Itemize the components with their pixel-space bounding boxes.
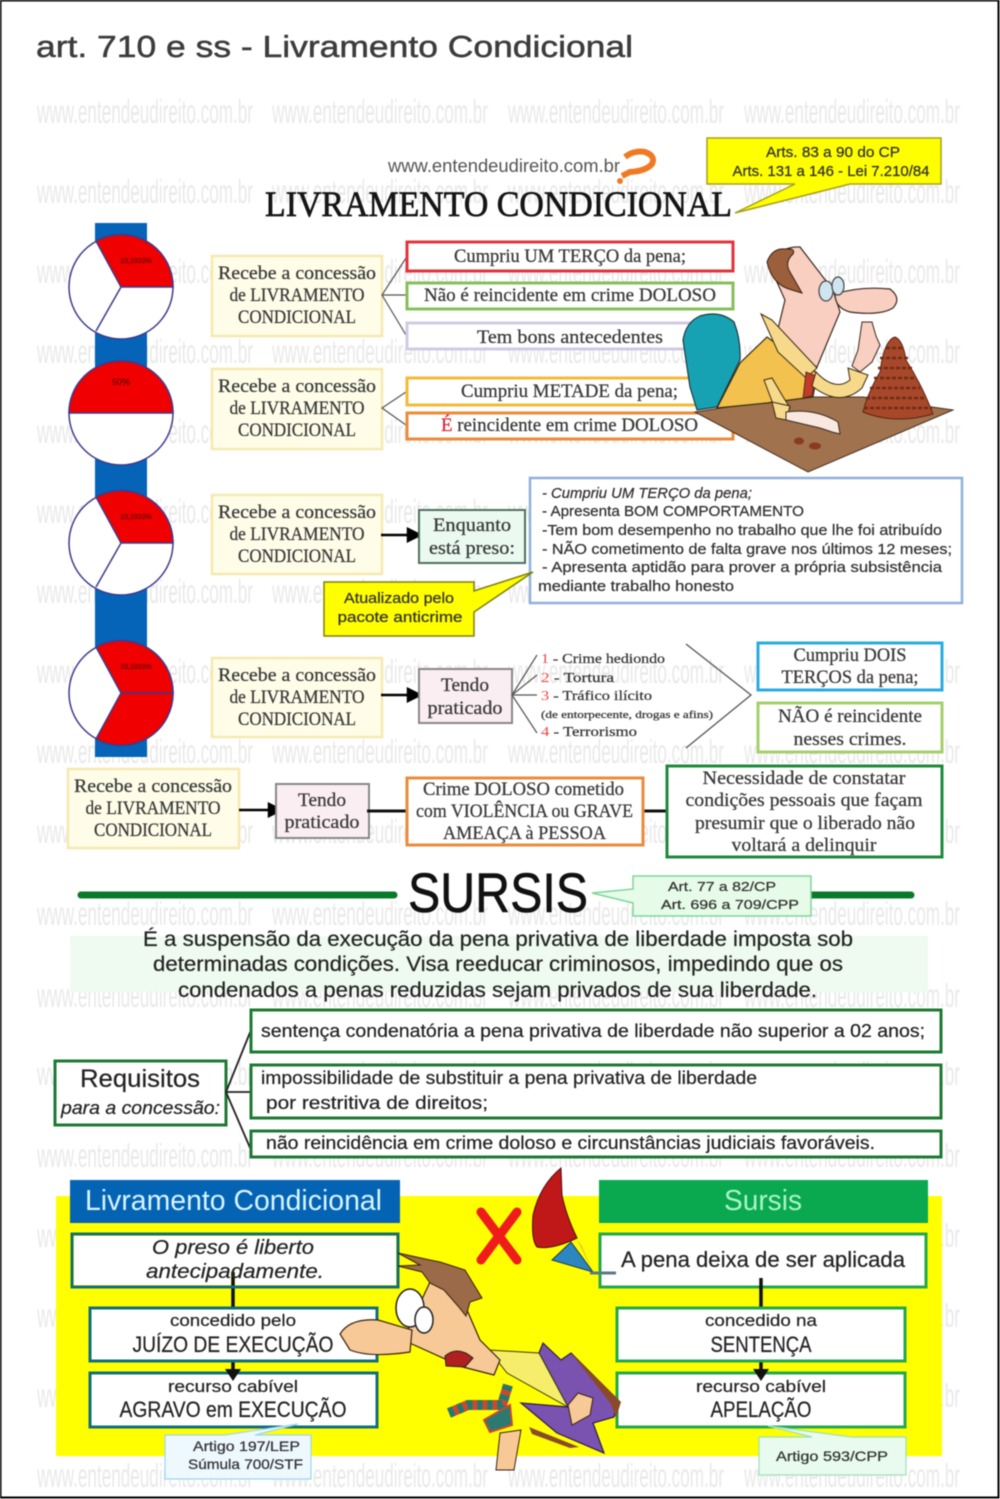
concession box 5: CONDICIONAL — [94, 820, 212, 841]
concession box 2: de LIVRAMENTO — [230, 398, 364, 419]
pie: metade — [69, 361, 173, 465]
box: preso liberto: O preso é liberto — [152, 1237, 314, 1259]
text: www.entendeudireito.com.br — [271, 895, 488, 932]
arrowhead — [753, 1369, 769, 1381]
header: Livramento Condicional — [85, 1185, 382, 1217]
callout: artigos sursis: Art. 77 a 82/CP — [668, 879, 776, 894]
box: enquanto está preso: está preso: — [429, 538, 515, 559]
text: www.entendeudireito.com.br — [36, 895, 253, 932]
heading: sursis: SURSIS — [408, 861, 588, 924]
text: www.entendeudireito.com.br — [271, 813, 488, 850]
box: apelação — [617, 1373, 905, 1427]
text: www.entendeudireito.com.br — [36, 253, 253, 290]
box: necessidade de constatar: condições pessoais que façam — [686, 790, 923, 811]
condition: um terço — [407, 242, 733, 271]
text: www.entendeudireito.com.br — [507, 333, 724, 370]
pie: metade: 50% — [112, 377, 130, 387]
callout: pacote anticrime: pacote anticrime — [338, 609, 462, 626]
concession box 4 — [212, 658, 382, 737]
box: requisitos preso — [530, 478, 962, 603]
header: Sursis — [724, 1185, 802, 1217]
box: juízo de execução: JUÍZO DE EXECUÇÃO — [132, 1332, 334, 1357]
text: www.entendeudireito.com.br — [36, 413, 253, 450]
concession box 1: de LIVRAMENTO — [230, 285, 364, 306]
text: www.entendeudireito.com.br — [36, 573, 253, 610]
box: dois terços: Cumpriu DOIS — [794, 645, 906, 666]
definition of sursis — [70, 928, 928, 1002]
box: crime doloso: AMEAÇA à PESSOA — [443, 823, 606, 844]
text: www.entendeudireito.com.br — [271, 653, 488, 690]
text: www.entendeudireito.com.br — [271, 333, 488, 370]
text: www.entendeudireito.com.br — [36, 733, 253, 770]
yellow comparison panel — [56, 1196, 942, 1456]
text: www.entendeudireito.com.br — [36, 173, 253, 210]
text: www.entendeudireito.com.br — [507, 733, 724, 770]
concession box 4: de LIVRAMENTO — [230, 687, 364, 708]
list of crimes — [541, 652, 713, 740]
concession box 2: Recebe a concessão — [218, 376, 376, 397]
text: www.entendeudireito.com.br — [271, 413, 488, 450]
text: www.entendeudireito.com.br — [507, 93, 724, 130]
box: preso liberto — [72, 1234, 398, 1287]
callout: artigo 593 — [759, 1426, 906, 1475]
box: apelação: APELAÇÃO — [710, 1397, 812, 1422]
box: tendo praticado: praticado — [284, 812, 360, 833]
callout: artigo 593: Artigo 593/CPP — [776, 1448, 888, 1464]
concession box 2 — [212, 369, 382, 449]
text: www.entendeudireito.com.br — [507, 573, 724, 610]
text: www.entendeudireito.com.br — [271, 93, 488, 130]
box: crime doloso: Crime DOLOSO cometido — [423, 779, 624, 800]
timeline bar — [95, 223, 147, 757]
box: tendo praticado: Tendo — [441, 675, 489, 696]
text: www.entendeudireito.com.br — [36, 493, 253, 530]
box: pena deixa de ser aplicada: A pena deixa de ser aplicada — [621, 1247, 906, 1272]
box: dois terços — [758, 643, 942, 690]
condition: um terço: Cumpriu UM TERÇO da pena; — [454, 246, 686, 267]
box: requisitos preso: - Apresenta aptidão para prover a própria subsistência — [542, 559, 943, 576]
box: sentença: SENTENÇA — [710, 1332, 812, 1357]
requisito 3 — [251, 1131, 941, 1157]
callout: artigos: Arts. 131 a 146 - Lei 7.210/84 — [732, 163, 930, 180]
arrow — [381, 529, 420, 541]
text: www.entendeudireito.com.br — [36, 977, 253, 1014]
box: necessidade de constatar: Necessidade de constatar — [702, 768, 906, 789]
condition: não reincidente: Não é reincidente em crime DOLOSO — [424, 285, 716, 306]
box: sentença: concedido na — [705, 1311, 818, 1330]
box: pena deixa de ser aplicada — [600, 1234, 926, 1287]
condition: reincidente: É reincidente em crime DOLOSO — [441, 414, 698, 436]
concession box 4: CONDICIONAL — [238, 709, 356, 730]
box: tendo praticado: praticado — [428, 698, 502, 719]
chevron — [686, 644, 751, 748]
icon: red x — [481, 1212, 517, 1260]
title: art. 710 e ss - Livramento Condicional — [36, 29, 633, 64]
box: tendo praticado: Tendo — [298, 790, 346, 811]
box: agravo em execução: recurso cabível — [168, 1377, 298, 1396]
callout: artigos sursis: Art. 696 a 709/CPP — [661, 897, 799, 912]
box: não reincidente nesses crimes — [758, 703, 942, 752]
box: tendo praticado — [419, 669, 512, 723]
arrow — [381, 689, 420, 701]
illustration: man counting coins — [683, 247, 953, 472]
box: não reincidente nesses crimes: NÃO é reincidente — [778, 705, 922, 727]
box: necessidade de constatar — [667, 766, 942, 857]
arrow — [239, 804, 281, 816]
pie: um terço (preso) — [69, 491, 173, 595]
box: tendo praticado — [276, 784, 369, 838]
definition of sursis: determinadas condições. Visa reeducar criminosos, impedindo que os — [153, 953, 843, 976]
box: não reincidente nesses crimes: nesses crimes. — [794, 729, 906, 750]
text: www.entendeudireito.com.br — [36, 1137, 253, 1174]
concession box 5: de LIVRAMENTO — [86, 798, 220, 819]
text: www.entendeudireito.com.br — [507, 493, 724, 530]
box: requisitos preso: - Apresenta BOM COMPORTAMENTO — [542, 503, 804, 520]
box: agravo em execução: AGRAVO em EXECUÇÃO — [120, 1397, 346, 1422]
header — [70, 1180, 400, 1223]
callout: artigo 197: Artigo 197/LEP — [193, 1438, 300, 1454]
text: www.entendeudireito.com.br — [271, 1055, 488, 1092]
callout: artigo 197: Súmula 700/STF — [188, 1456, 303, 1472]
text: www.entendeudireito.com.br — [507, 1055, 724, 1092]
pie: dois terços — [69, 641, 173, 745]
concession box 3: de LIVRAMENTO — [230, 524, 364, 545]
text: www.entendeudireito.com.br — [36, 653, 253, 690]
text: www.entendeudireito.com.br — [507, 253, 724, 290]
box: requisitos: Requisitos — [80, 1065, 200, 1093]
box: crime doloso: com VIOLÊNCIA ou GRAVE — [416, 800, 633, 822]
illustration: running man — [340, 1253, 621, 1470]
text: www.entendeudireito.com.br — [271, 1457, 488, 1494]
sursis rule lines — [81, 892, 911, 898]
callout: artigo 197 — [165, 1424, 311, 1479]
list of crimes: 1 - Crime hediondo — [541, 652, 665, 667]
callout: pacote anticrime — [324, 572, 533, 636]
condition: reincidente — [407, 413, 733, 439]
pie: um terço — [69, 235, 173, 339]
concession box 1: CONDICIONAL — [238, 307, 356, 328]
box: dois terços: TERÇOS da pena; — [782, 667, 918, 688]
condition: bons antecedentes: Tem bons antecedentes — [477, 327, 663, 348]
text: www.entendeudireito.com.br — [271, 253, 488, 290]
text: www.entendeudireito.com.br — [271, 1137, 488, 1174]
text: www.entendeudireito.com.br — [271, 977, 488, 1014]
box: agravo em execução — [90, 1373, 377, 1427]
box: necessidade de constatar: presumir que o liberado não — [695, 813, 915, 834]
box: preso liberto: antecipadamente. — [146, 1261, 324, 1283]
heading: livramento condicional: LIVRAMENTO CONDICIONAL — [265, 184, 732, 224]
box: enquanto está preso: Enquanto — [433, 515, 511, 536]
column: livramento condicional — [70, 1180, 400, 1479]
concession box 5: Recebe a concessão — [74, 776, 232, 797]
concession box 3: CONDICIONAL — [238, 546, 356, 567]
text: www.entendeudireito.com.br — [507, 653, 724, 690]
icon: feather — [532, 1168, 616, 1273]
text: www.entendeudireito.com.br — [507, 413, 724, 450]
text: www.entendeudireito.com.br — [507, 813, 724, 850]
callout: artigos — [707, 138, 941, 213]
text: www.entendeudireito.com.br — [507, 1457, 724, 1494]
site logo: www.entendeudireito.com.br — [387, 156, 620, 176]
definition of sursis: condenados a penas reduzidas sejam privados de sua liberdade. — [178, 979, 817, 1002]
box: juízo de execução: concedido pelo — [170, 1311, 296, 1330]
concession box 4: Recebe a concessão — [218, 665, 376, 686]
concession box 3 — [212, 495, 382, 574]
concession box 5 — [68, 769, 239, 848]
text: www.entendeudireito.com.br — [36, 813, 253, 850]
box: requisitos preso: - Cumpriu UM TERÇO da pena; — [542, 485, 752, 502]
box: apelação: recurso cabível — [696, 1377, 826, 1396]
box: requisitos preso: -Tem bom desempenho no trabalho que lhe foi atribuído — [542, 522, 942, 539]
callout: artigos: Arts. 83 a 90 do CP — [766, 144, 900, 161]
list of crimes: 4 - Terrorismo — [541, 725, 637, 740]
concession box 1 — [212, 256, 382, 336]
text: www.entendeudireito.com.br — [507, 173, 724, 210]
text: www.entendeudireito.com.br — [36, 1297, 253, 1334]
requisito 1: sentença condenatória a pena privativa de liberdade não superior a 02 anos; — [261, 1021, 925, 1041]
site logo — [387, 152, 653, 184]
box: requisitos preso: mediante trabalho honesto — [538, 578, 734, 595]
requisito 2: por restritiva de direitos; — [266, 1093, 488, 1113]
definition of sursis: É a suspensão da execução da pena privativa de liberdade imposta sob — [143, 928, 853, 951]
condition: metade — [407, 378, 717, 405]
box: requisitos — [55, 1061, 226, 1125]
callout: artigos sursis — [592, 876, 811, 916]
pie: um terço (preso): 33,3333% — [120, 514, 152, 521]
pie: um terço: 33,3333% — [120, 258, 152, 265]
header — [599, 1180, 928, 1223]
condition: bons antecedentes — [407, 323, 707, 349]
text: www.entendeudireito.com.br — [271, 733, 488, 770]
text: www.entendeudireito.com.br — [507, 895, 724, 932]
text: www.entendeudireito.com.br — [271, 573, 488, 610]
text: www.entendeudireito.com.br — [36, 1055, 253, 1092]
text: www.entendeudireito.com.br — [36, 1377, 253, 1414]
box: enquanto está preso — [419, 510, 525, 563]
text: www.entendeudireito.com.br — [507, 1137, 724, 1174]
text: www.entendeudireito.com.br — [36, 93, 253, 130]
box: necessidade de constatar: voltará a delinquir — [732, 835, 877, 856]
concession box 3: Recebe a concessão — [218, 502, 376, 523]
text: www.entendeudireito.com.br — [271, 493, 488, 530]
concession box 2: CONDICIONAL — [238, 420, 356, 441]
column: sursis — [599, 1180, 928, 1475]
callout: pacote anticrime: Atualizado pelo — [344, 590, 454, 607]
list of crimes: 2 - Tortura — [541, 671, 615, 686]
concession box 1: Recebe a concessão — [218, 263, 376, 284]
box: requisitos: para a concessão: — [60, 1098, 220, 1118]
box: sentença — [617, 1308, 905, 1361]
list of crimes: 3 - Tráfico ilícito — [541, 689, 652, 704]
requisito 1 — [251, 1010, 941, 1052]
box: requisitos preso: - NÃO cometimento de falta grave nos últimos 12 meses; — [542, 541, 952, 558]
arrowhead — [225, 1369, 241, 1381]
text: www.entendeudireito.com.br — [36, 333, 253, 370]
list of crimes: (de entorpecente, drogas e afins) — [541, 710, 713, 721]
text: www.entendeudireito.com.br — [507, 977, 724, 1014]
requisito 3: não reincidência em crime doloso e circunstâncias judiciais favoráveis. — [266, 1133, 875, 1153]
pie: dois terços: 33,3333% — [120, 664, 152, 671]
text: www.entendeudireito.com.br — [36, 1457, 253, 1494]
box: juízo de execução — [90, 1308, 377, 1361]
requisito 2: impossibilidade de substituir a pena privativa de liberdade — [261, 1068, 757, 1088]
text: www.entendeudireito.com.br — [271, 173, 488, 210]
text: www.entendeudireito.com.br — [36, 1217, 253, 1254]
box: crime doloso — [407, 778, 643, 845]
condition: metade: Cumpriu METADE da pena; — [461, 381, 678, 402]
requisito 2 — [251, 1065, 941, 1118]
